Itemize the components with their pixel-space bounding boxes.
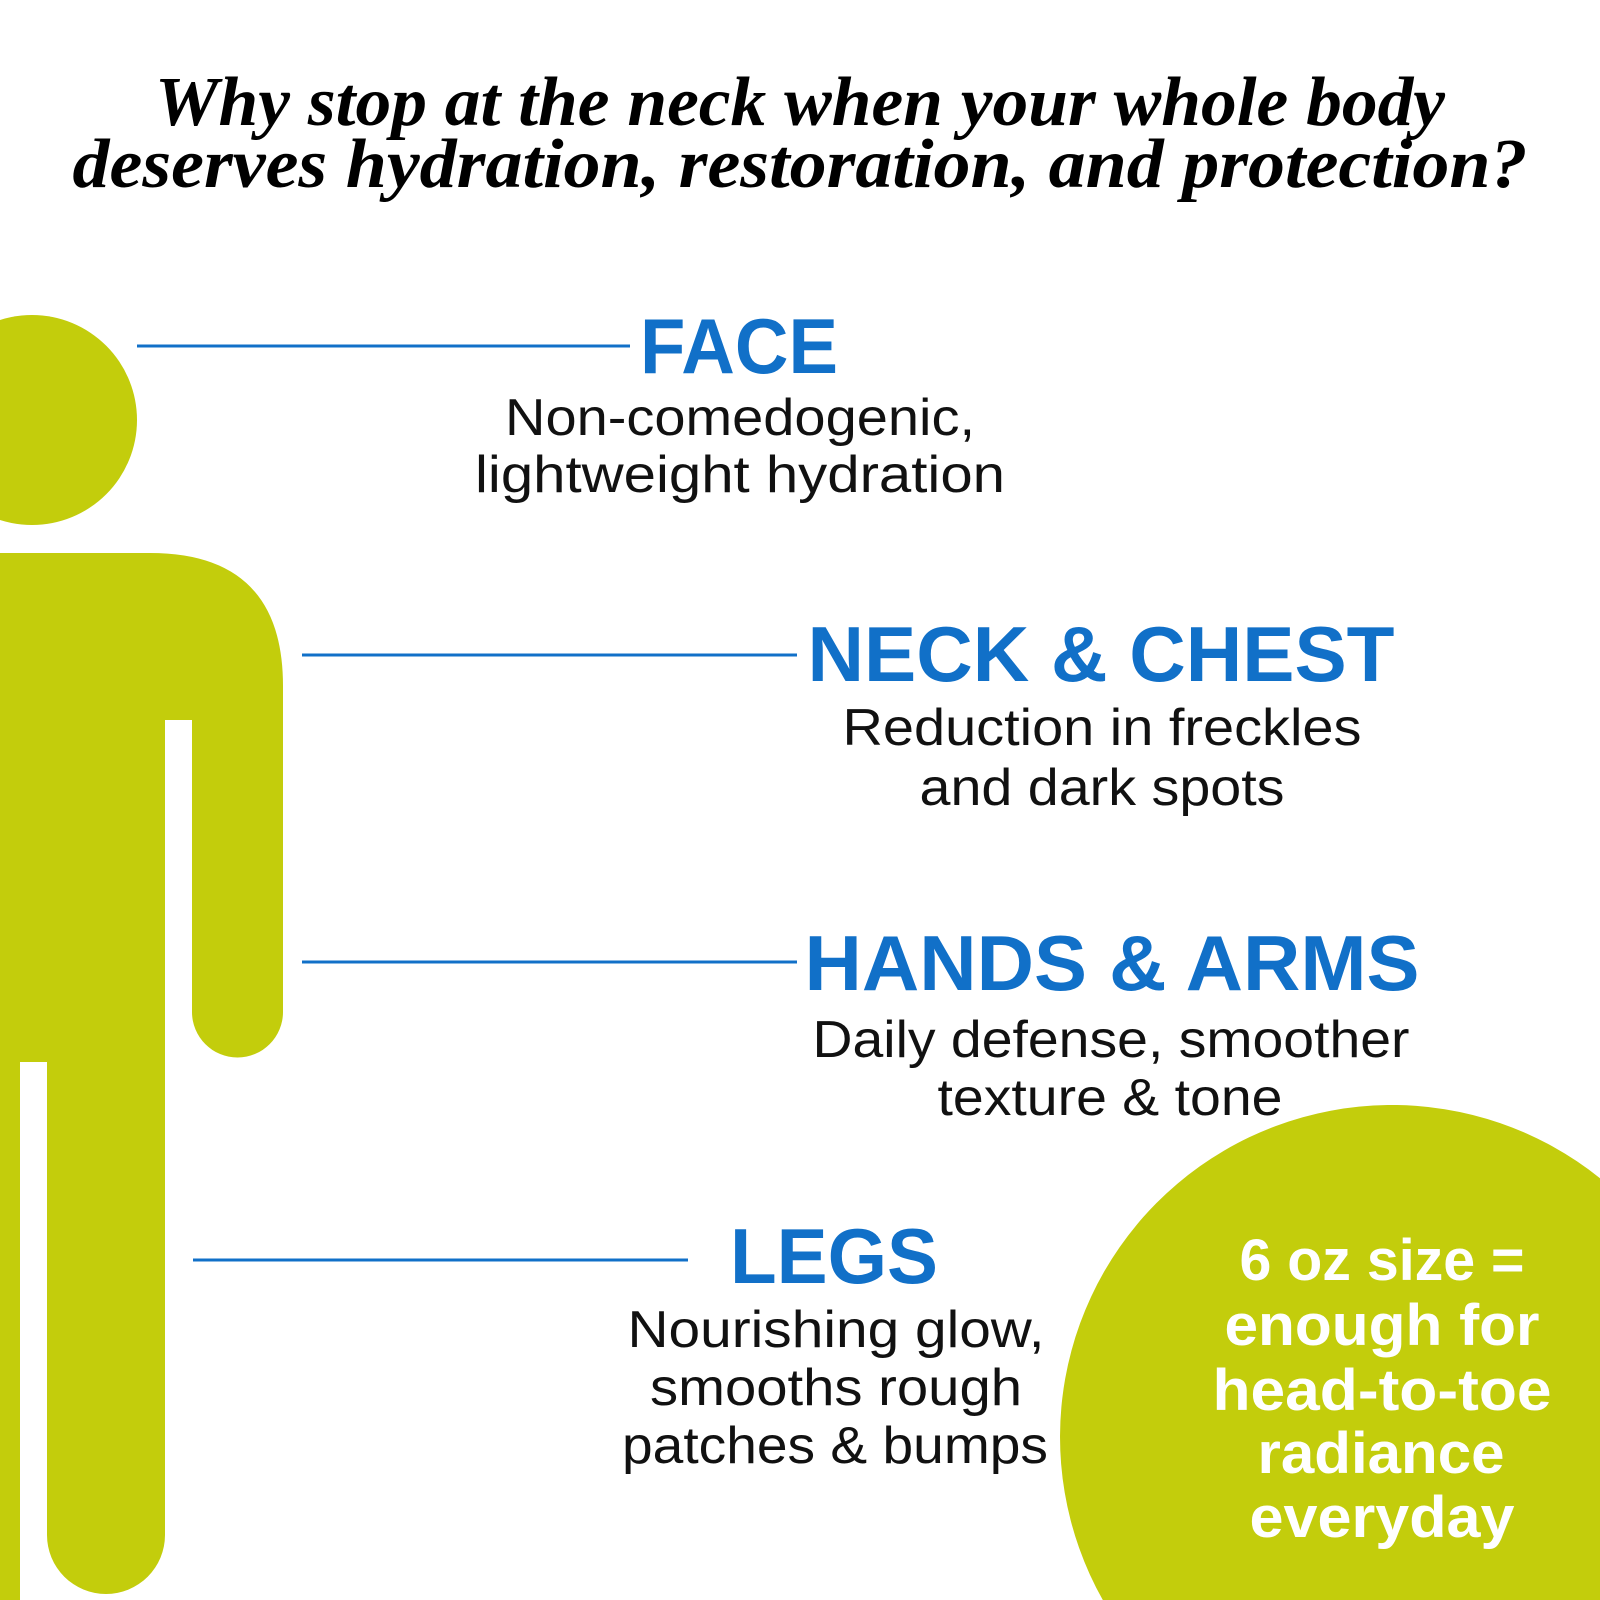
badge text bbox=[1212, 1228, 1552, 1550]
badge text: enough for bbox=[1224, 1293, 1540, 1358]
section: legs: LEGS bbox=[730, 1212, 938, 1300]
badge: green circle bbox=[1060, 1105, 1600, 1600]
title bbox=[72, 64, 1528, 203]
section: hands & arms: HANDS & ARMS bbox=[804, 919, 1420, 1007]
section: neck & chest: Reduction in freckles bbox=[842, 699, 1362, 757]
section: hands & arms: texture & tone bbox=[938, 1069, 1282, 1127]
connector lines bbox=[137, 346, 797, 1260]
section: face: lightweight hydration bbox=[475, 446, 1005, 504]
section: legs: Nourishing glow, bbox=[628, 1301, 1044, 1359]
section: face bbox=[475, 302, 1005, 504]
section: hands & arms: Daily defense, smoother bbox=[812, 1011, 1410, 1069]
badge text: everyday bbox=[1250, 1485, 1514, 1550]
badge text: head-to-toe bbox=[1212, 1358, 1552, 1423]
section: legs: smooths rough bbox=[650, 1359, 1022, 1417]
section: neck & chest: and dark spots bbox=[920, 759, 1284, 817]
section: face: FACE bbox=[640, 302, 838, 390]
section: hands & arms bbox=[804, 919, 1420, 1127]
section: legs: patches & bumps bbox=[622, 1417, 1048, 1475]
badge text: radiance bbox=[1258, 1421, 1504, 1486]
section: neck & chest: NECK & CHEST bbox=[808, 610, 1394, 698]
section: neck & chest bbox=[808, 610, 1394, 817]
figure: human silhouette bbox=[0, 315, 283, 1600]
badge text: 6 oz size = bbox=[1240, 1228, 1524, 1293]
section: face: Non-comedogenic, bbox=[505, 389, 975, 447]
title: deserves hydration, restoration, and protection? bbox=[72, 126, 1528, 203]
title: Why stop at the neck when your whole body bbox=[155, 64, 1446, 141]
section: legs bbox=[622, 1212, 1048, 1475]
